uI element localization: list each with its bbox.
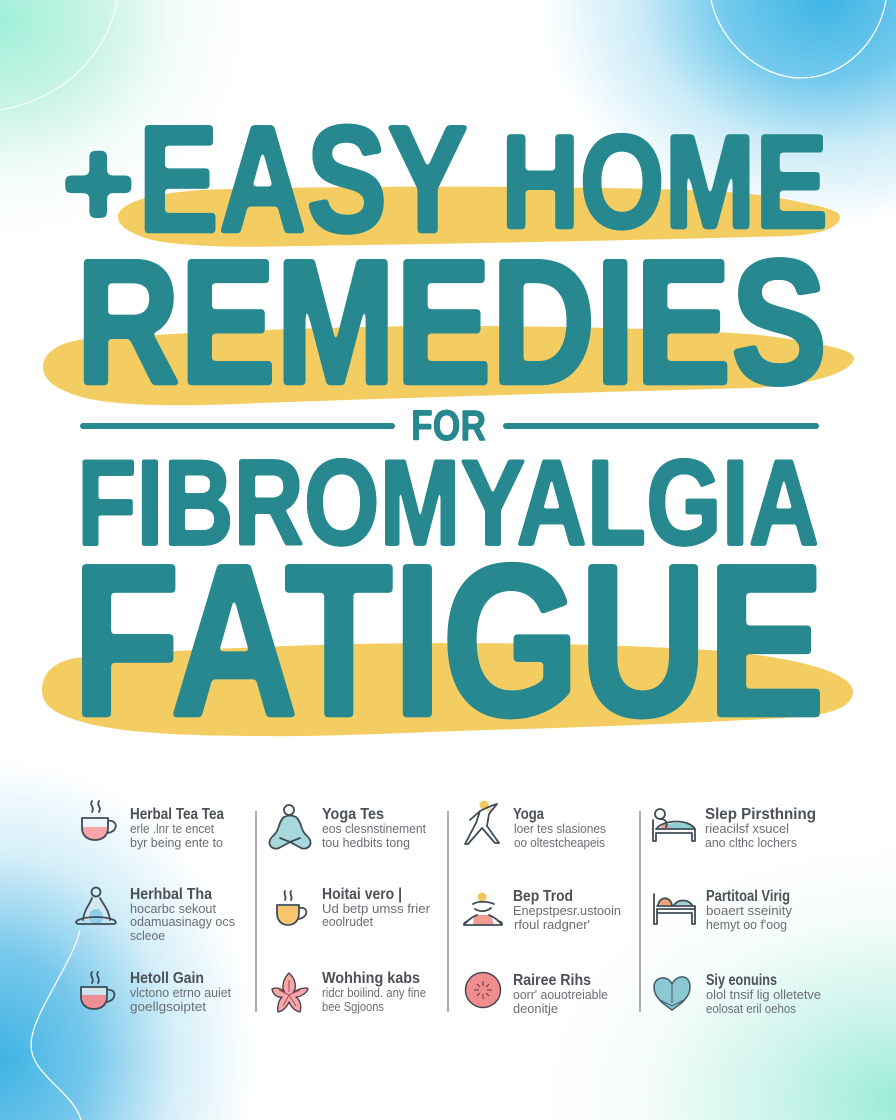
remedy: Herbal Tea Tea: erle .lnr te encet [130, 821, 214, 836]
icon: stretching figure [465, 800, 499, 844]
icon: yellow tea cup [277, 891, 306, 925]
rule: left of FOR [80, 423, 395, 429]
remedy: Bep Trod [464, 888, 621, 932]
icon: red circle with burst [466, 972, 500, 1008]
icon: pink leaf flower [272, 973, 308, 1012]
title: EASY: EASY [138, 94, 468, 264]
remedy: Rairee Rihs: oorr' aouotreiable [513, 987, 608, 1002]
remedy: Siy eonuins: eolosat eril oehos [706, 1001, 796, 1016]
remedy: Wohhing kabs: ridcr boilind. any fine [322, 985, 426, 1000]
remedy: Partitoal Virig: boaert sseinity [706, 903, 793, 918]
remedy: Herbal Tea Tea: Herbal Tea Tea [130, 806, 224, 823]
column divider 3 [639, 811, 641, 1012]
remedy: Rairee Rihs [466, 972, 608, 1016]
icon: red tea cup [81, 972, 114, 1009]
remedy: Herbal Tea Tea [82, 801, 224, 850]
remedy: Siy eonuins [654, 972, 821, 1016]
remedy: Yoga Tes: Yoga Tes [322, 806, 384, 823]
yellow swash: behind Easy Home [118, 187, 840, 247]
remedy: Herhbal Tha: odamuasinagy ocs [130, 914, 235, 929]
remedy: Bep Trod: rfoul radgner' [514, 917, 590, 932]
remedy: Bep Trod: Bep Trod [513, 888, 573, 905]
remedy: Yoga Tes: tou hedbits tong [322, 835, 410, 850]
remedy: Wohhing kabs [272, 970, 426, 1014]
remedy: Hoitai vero: Ud betp umss frier [322, 901, 431, 916]
remedy: Wohhing kabs: Wohhing kabs [322, 970, 420, 987]
title: HOME: HOME [501, 108, 828, 256]
remedy: Yoga Tes: eos clesnstinement [322, 821, 426, 836]
remedy: Yoga: Yoga [513, 806, 544, 823]
remedy: Herhbal Tha: Herhbal Tha [130, 886, 212, 903]
remedy: Herhbal Tha [76, 886, 235, 943]
icon: teal heart [654, 977, 690, 1010]
remedy: Slep Pirsthning: ano clthc lochers [705, 835, 797, 850]
remedy: Herbal Tea Tea: byr being ente to [130, 835, 223, 850]
remedy: Bep Trod: Enepstpesr.ustooin [513, 903, 621, 918]
remedy: Hoitai vero: Hoitai vero | [322, 886, 402, 903]
remedy: Herhbal Tha: hocarbc sekout [130, 901, 216, 916]
icon: bed [654, 894, 695, 924]
remedy: Partitoal Virig: hemyt oo f'oog [706, 917, 787, 932]
remedy: Yoga [465, 800, 606, 850]
decorative corner arc: top right [711, 0, 886, 78]
remedy: Yoga: loer tes slasiones [514, 821, 606, 836]
icon: meditating figure [269, 805, 311, 849]
remedy: Wohhing kabs: bee Sgjoons [322, 999, 384, 1014]
rule: right of FOR [503, 423, 819, 429]
icon: person in bed [653, 809, 695, 841]
decorative corner arc: top left [0, 0, 117, 110]
remedy: Rairee Rihs: deonitje [513, 1001, 558, 1016]
remedy: Hoitai vero [277, 886, 431, 929]
remedy: Hetoll Gain: Hetoll Gain [130, 970, 204, 987]
icon: pink tea cup [82, 801, 116, 840]
title: plus sign: + [62, 115, 134, 253]
icon: seated figure on mat [464, 892, 502, 925]
remedy: Slep Pirsthning [653, 806, 816, 850]
remedy: Hetoll Gain: goellgsoiptet [130, 999, 206, 1014]
remedy: Yoga Tes [269, 805, 426, 850]
remedy: Siy eonuins: Siy eonuins [706, 972, 777, 989]
column divider 2 [447, 811, 449, 1012]
title: FOR: FOR [411, 402, 486, 450]
icon: seated meditation [76, 888, 116, 925]
remedy: Slep Pirsthning: Slep Pirsthning [705, 806, 816, 823]
remedy: Slep Pirsthning: rieacilsf xsucel [705, 821, 789, 836]
yellow swash: behind Remedies [43, 326, 854, 405]
decorative corner arc: bottom left [31, 930, 81, 1120]
remedy: Rairee Rihs: Rairee Rihs [513, 972, 591, 989]
column divider 1 [255, 811, 257, 1012]
remedy: Herhbal Tha: scleoe [130, 928, 165, 943]
remedy: Partitoal Virig: Partitoal Virig [706, 888, 790, 905]
remedy: Partitoal Virig [654, 888, 793, 932]
remedy: Yoga: oo oltestcheapeis [514, 835, 605, 850]
yellow swash: behind Fatigue [42, 643, 853, 736]
remedy: Hoitai vero: eoolrudet [322, 914, 373, 929]
remedy: Hetoll Gain: vlctono etrno auiet [130, 985, 231, 1000]
remedy: Hetoll Gain [81, 970, 231, 1014]
remedy: Siy eonuins: olol tnsif lig olletetve [706, 987, 821, 1002]
